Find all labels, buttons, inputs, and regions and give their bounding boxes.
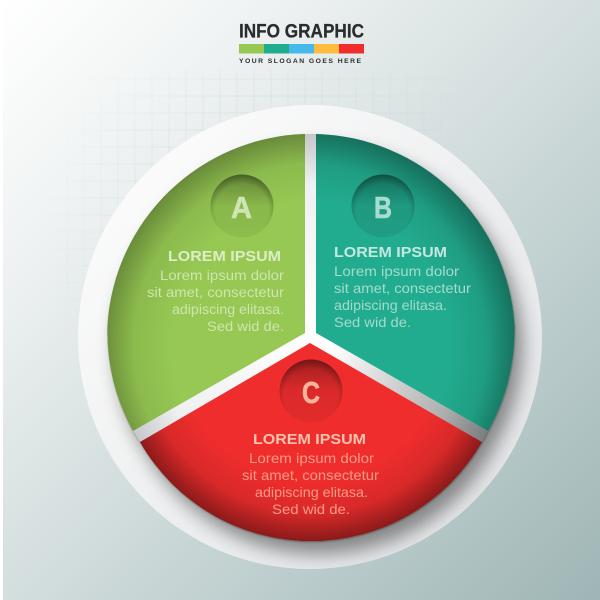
panel: A green bbox=[107, 134, 305, 431]
ring inner shadow bbox=[108, 135, 523, 554]
heading C: LOREM IPSUM bbox=[253, 431, 366, 448]
segment B bbox=[316, 134, 515, 431]
body C: Lorem ipsum dolor bbox=[249, 450, 374, 466]
body B: Sed wid de. bbox=[334, 314, 411, 330]
header: logo block bbox=[239, 22, 364, 65]
badge A bbox=[210, 174, 274, 238]
body C: adipiscing elitasa. bbox=[255, 484, 368, 500]
background grid bbox=[84, 70, 424, 266]
body A: Sed wid de. bbox=[207, 318, 284, 334]
badge B bbox=[352, 174, 414, 238]
panel: B teal bbox=[316, 134, 515, 431]
badge C: C bbox=[302, 375, 320, 410]
body B: sit amet, consectetur bbox=[334, 280, 471, 296]
panel: C red bbox=[140, 343, 482, 541]
body B bbox=[334, 263, 471, 330]
heading B: LOREM IPSUM bbox=[334, 244, 447, 261]
body A: Lorem ipsum dolor bbox=[160, 267, 284, 283]
body C bbox=[242, 450, 379, 517]
body B: adipiscing elitasa. bbox=[334, 297, 447, 313]
body A: sit amet, consectetur bbox=[147, 284, 284, 300]
body A: adipiscing elitasa. bbox=[172, 301, 284, 317]
badge C bbox=[280, 360, 342, 422]
outer ring bbox=[78, 105, 542, 569]
badge A: A bbox=[231, 190, 252, 225]
title: INFO GRAPHIC bbox=[239, 22, 364, 42]
body C: Sed wid de. bbox=[272, 501, 350, 517]
body A bbox=[147, 267, 284, 334]
segment A bbox=[107, 134, 305, 431]
inner disc base bbox=[107, 134, 515, 541]
slogan: YOUR SLOGAN GOES HERE bbox=[239, 58, 361, 65]
badge B: B bbox=[374, 190, 392, 225]
body B: Lorem ipsum dolor bbox=[334, 263, 459, 279]
segment C bbox=[140, 343, 482, 541]
colour bar bbox=[239, 44, 364, 54]
heading A: LOREM IPSUM bbox=[168, 248, 281, 265]
body C: sit amet, consectetur bbox=[242, 467, 379, 483]
